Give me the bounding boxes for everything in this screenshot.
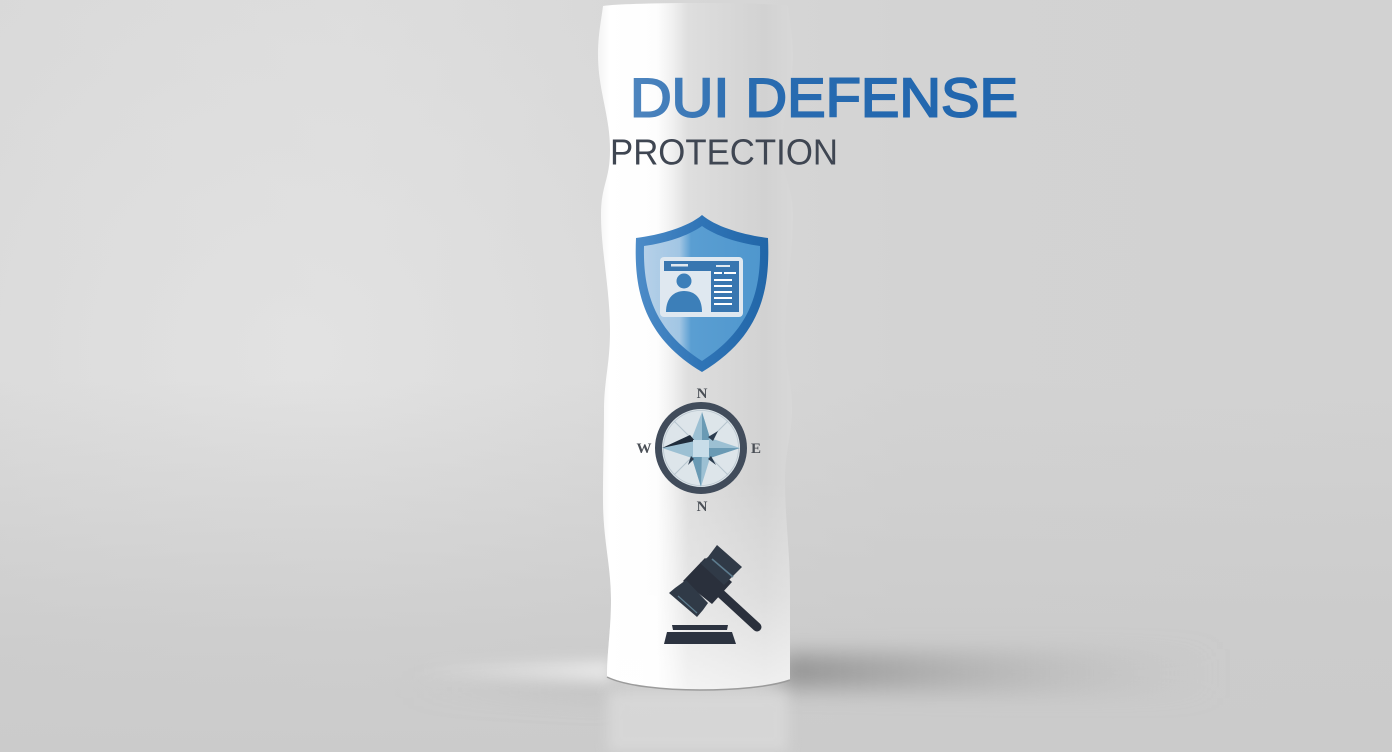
subtitle: PROTECTION xyxy=(610,132,838,172)
compass letters: W xyxy=(636,441,652,457)
column base edge xyxy=(607,677,790,690)
icon: gavel xyxy=(664,545,757,644)
compass letters: E xyxy=(751,441,761,457)
compass letters xyxy=(636,386,761,515)
gavel block xyxy=(672,625,728,630)
floor shadow xyxy=(400,648,1300,704)
column body xyxy=(598,3,793,690)
gavel handle xyxy=(719,592,757,627)
gavel head xyxy=(683,558,732,604)
compass letters: N xyxy=(697,499,708,515)
compass letters: N xyxy=(697,386,708,402)
title: DUI DEFENSE xyxy=(630,66,1018,128)
icon: shield with ID card xyxy=(636,215,768,372)
icon: compass xyxy=(636,386,761,515)
id card xyxy=(660,257,743,317)
floor highlight and reflection xyxy=(420,660,788,752)
